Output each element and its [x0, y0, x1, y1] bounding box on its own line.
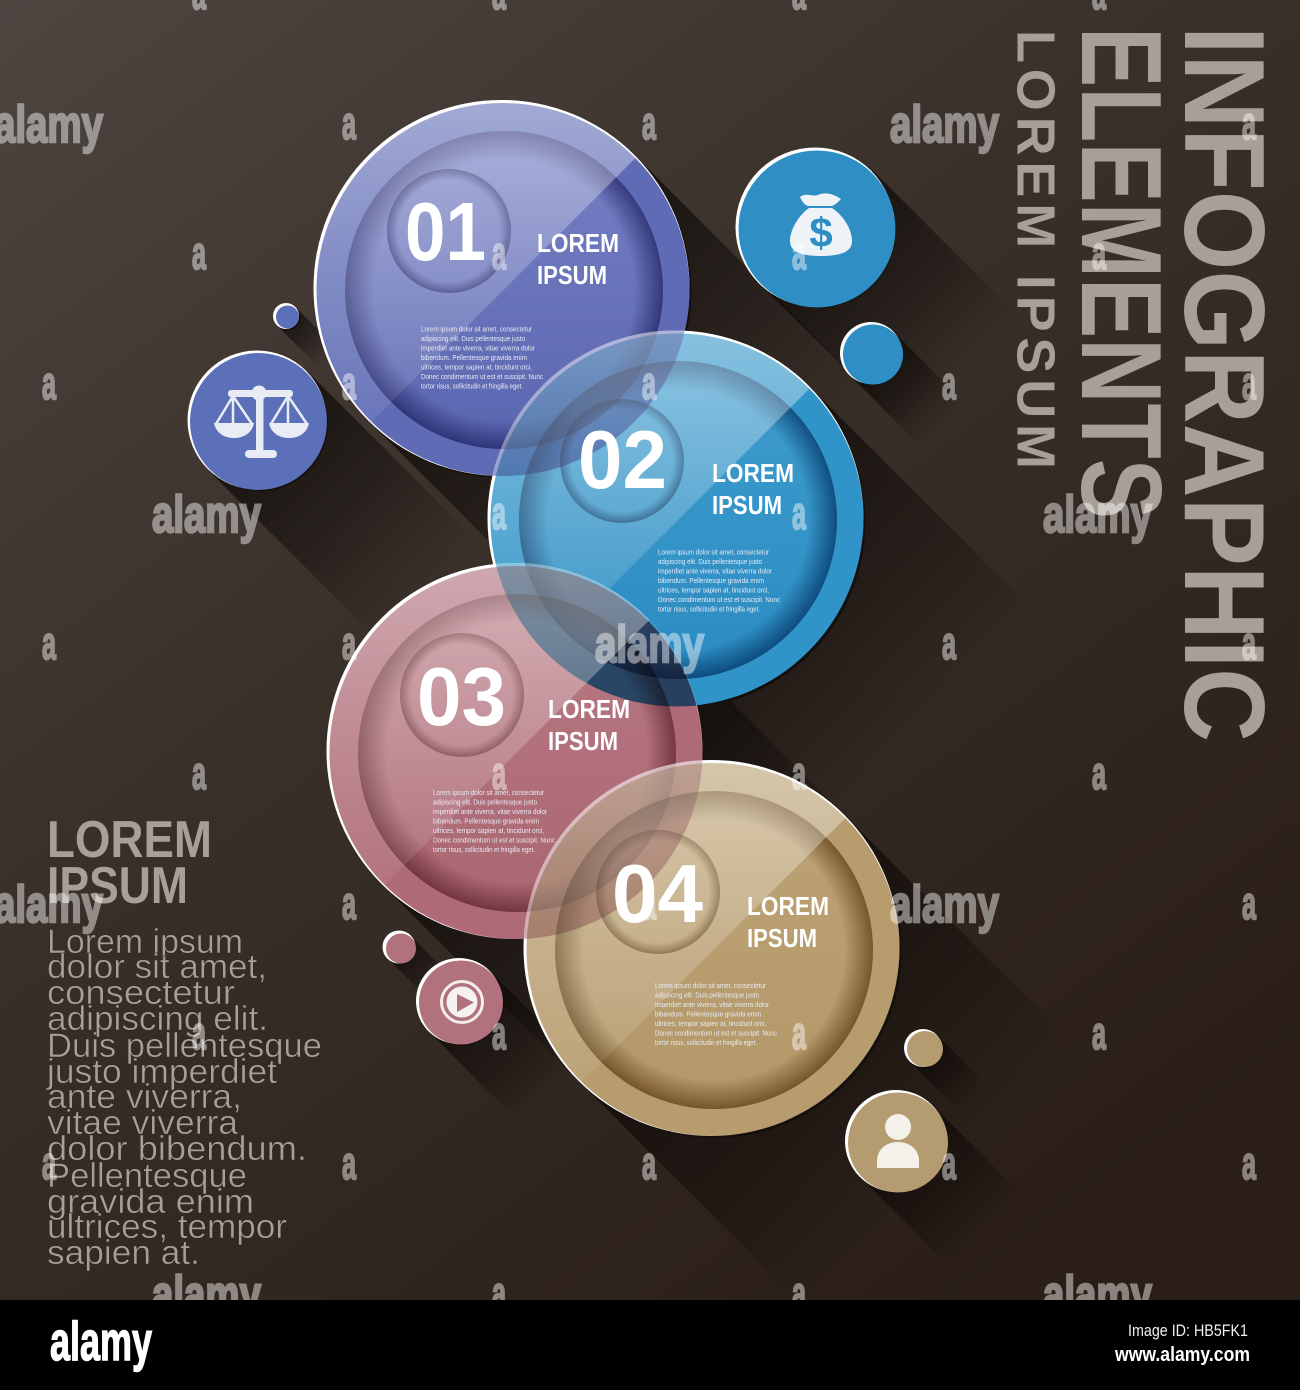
text: circle 04: Donec condimentum ut est et suscipit. Nunc — [655, 1028, 777, 1038]
watermark overlay: a — [192, 1007, 206, 1059]
watermark overlay: a — [342, 97, 356, 149]
watermark overlay: a — [492, 487, 506, 539]
text: circle 02: Lorem ipsum dolor sit amet, consectetur — [658, 548, 769, 556]
watermark overlay: a — [642, 97, 656, 149]
watermark overlay: a — [942, 617, 956, 669]
text: circle 04: bibendum. Pellentesque gravida enim — [655, 1010, 761, 1018]
watermark overlay: a — [1242, 1137, 1256, 1189]
text: circle 01: tortor risus, sollicitudin et fringilla eget. — [421, 382, 523, 390]
text: circle 02: adipiscing elit. Duis pellentesque justo — [658, 557, 762, 566]
text: circle 01: bibendum. Pellentesque gravida enim — [421, 353, 527, 362]
text: circle 01: ultrices, tempor sapien at, tincidunt orci, — [421, 362, 532, 372]
watermark overlay: a — [642, 1137, 656, 1189]
text: circle 01: Donec condimentum ut est et suscipit. Nunc — [421, 372, 543, 381]
watermark overlay: a — [342, 1137, 356, 1189]
text: circle 02: Donec condimentum ut est et suscipit. Nunc — [658, 595, 780, 604]
watermark overlay: a — [1242, 97, 1256, 149]
icon: money bag badge — [736, 148, 896, 308]
left body text: Duis pellentesque — [47, 1027, 322, 1065]
text: circle 02 — [578, 413, 794, 614]
watermark overlay: alamy — [890, 96, 999, 154]
watermark overlay: a — [1092, 227, 1106, 279]
text: circle 01: imperdiet ante viverra, vitae viverra dolor — [421, 344, 535, 352]
left body text: Pellentesque — [47, 1157, 247, 1195]
watermark overlay: alamy — [890, 876, 999, 934]
text: circle 03: adipiscing elit. Duis pellentesque justo — [433, 798, 537, 806]
text: circle 02: imperdiet ante viverra, vitae viverra dolor — [658, 566, 772, 576]
text: circle 01: 01 — [405, 185, 486, 278]
watermark overlay: a — [492, 227, 506, 279]
panel: circle 03 — [326, 563, 702, 939]
left body text: gravida enim — [47, 1183, 254, 1221]
watermark overlay: a — [792, 747, 806, 799]
text: circle 03: imperdiet ante viverra, vitae viverra dolor — [433, 807, 547, 816]
small pink dot — [382, 930, 416, 964]
watermark overlay: a — [642, 357, 656, 409]
watermark overlay: a — [42, 357, 56, 409]
text: circle 03: ultrices, tempor sapien at, tincidunt orci, — [433, 826, 544, 835]
watermark overlay: alamy — [1043, 1266, 1152, 1324]
left body text: dolor sit amet, — [47, 948, 267, 986]
text: circle 01: LOREM — [537, 228, 619, 258]
text: circle 04: IPSUM — [747, 923, 817, 953]
watermark overlay: a — [1242, 877, 1256, 929]
text: circle 04: LOREM — [747, 891, 829, 921]
left body text: dolor bibendum. — [47, 1130, 307, 1168]
watermark overlay: a — [1242, 617, 1256, 669]
watermark overlay: a — [1092, 1007, 1106, 1059]
panel: circle 01 — [314, 100, 692, 478]
left body text — [46, 923, 322, 1272]
text: circle 04: imperdiet ante viverra, vitae viverra dolor — [655, 1000, 769, 1009]
text: circle 02: IPSUM — [712, 490, 782, 520]
text: circle 03: tortor risus, sollicitudin et fringilla eget. — [433, 845, 535, 854]
title: infographic elements (vertical) — [1006, 26, 1287, 742]
text: circle 01: Lorem ipsum dolor sit amet, consectetur — [421, 324, 532, 334]
watermark overlay: a — [792, 487, 806, 539]
watermark overlay: a — [792, 1007, 806, 1059]
footer bar: alamy — [50, 1310, 152, 1372]
text: circle 02: bibendum. Pellentesque gravida enim — [658, 576, 764, 585]
left body text: vitae viverra — [47, 1104, 238, 1142]
text: circle 03: bibendum. Pellentesque gravida enim — [433, 816, 539, 826]
small blue dot — [840, 322, 903, 385]
watermark overlay: a — [192, 227, 206, 279]
text: circle 03: Donec condimentum ut est et suscipit. Nunc — [433, 836, 555, 844]
watermark overlay: a — [42, 1137, 56, 1189]
watermark overlay: a — [342, 617, 356, 669]
title: infographic elements (vertical): INFOGRAPHIC — [1160, 26, 1287, 742]
watermark overlay: a — [942, 357, 956, 409]
small tan dot — [904, 1029, 943, 1068]
text: circle 02: ultrices, tempor sapien at, tincidunt orci, — [658, 586, 769, 594]
text: circle 01: IPSUM — [537, 260, 607, 290]
text: circle 02: LOREM — [712, 458, 794, 488]
text: circle 03: Lorem ipsum dolor sit amet, consectetur — [433, 788, 544, 797]
icon: person badge — [845, 1090, 948, 1193]
footer bar: Image ID: HB5FK1 — [1128, 1321, 1248, 1340]
text: circle 04: ultrices, tempor sapien at, tincidunt orci, — [655, 1019, 766, 1028]
text: circle 01: adipiscing elit. Duis pellentesque justo — [421, 334, 525, 343]
watermark overlay: a — [1242, 357, 1256, 409]
left body text: ultrices, tempor — [47, 1208, 287, 1246]
footer bar — [0, 1300, 1300, 1390]
watermark overlay: a — [192, 747, 206, 799]
left body text: sapien at. — [47, 1234, 200, 1272]
text: circle 03 — [417, 650, 630, 854]
watermark overlay: a — [492, 747, 506, 799]
small indigo dot — [273, 303, 300, 330]
icon: scales badge — [188, 350, 328, 491]
text: circle 02: 02 — [578, 413, 667, 506]
left body text: justo imperdiet — [46, 1053, 278, 1091]
watermark overlay: a — [642, 877, 656, 929]
icon: money bag badge: $ — [809, 209, 833, 256]
long shadows — [208, 155, 1071, 1307]
text: circle 04: 04 — [612, 847, 703, 940]
text: circle 01 — [405, 185, 619, 390]
left heading: LOREM — [47, 811, 212, 869]
panel: circle 04 — [524, 760, 902, 1138]
text: circle 03: LOREM — [548, 694, 630, 724]
left body text: ante viverra, — [47, 1078, 242, 1116]
title: infographic elements (vertical): ELEMENTS — [1057, 27, 1184, 519]
watermark overlay: a — [42, 617, 56, 669]
watermark overlay: a — [942, 1137, 956, 1189]
text: circle 04: tortor risus, sollicitudin et fringilla eget. — [655, 1038, 757, 1047]
watermark overlay: a — [342, 357, 356, 409]
footer bar: www.alamy.com — [1114, 1344, 1250, 1366]
watermark overlay: alamy — [1043, 486, 1152, 544]
watermark overlay: alamy — [595, 616, 704, 674]
watermark overlay: a — [342, 877, 356, 929]
watermark overlay: alamy — [152, 486, 261, 544]
title: infographic elements (vertical): LOREM IPSUM — [1006, 30, 1066, 469]
watermark overlay: a — [492, 1267, 506, 1319]
left body text: adipiscing elit. — [47, 1000, 268, 1038]
text: circle 03: 03 — [417, 650, 506, 743]
left body text: consectetur — [47, 974, 235, 1012]
text: circle 04: Lorem ipsum dolor sit amet, consectetur — [655, 981, 766, 990]
watermark overlay: a — [1092, 747, 1106, 799]
text: circle 04 — [612, 847, 829, 1047]
watermark overlay: a — [492, 1007, 506, 1059]
text: circle 03: IPSUM — [548, 726, 618, 756]
icon: play badge — [416, 958, 504, 1046]
watermark overlay: alamy — [152, 1266, 261, 1324]
panel: circle 02 — [488, 330, 866, 706]
left heading: IPSUM — [47, 857, 188, 915]
left heading — [47, 811, 212, 915]
left body text: Lorem ipsum — [47, 923, 243, 961]
watermark overlay: a — [792, 227, 806, 279]
text: circle 04: adipiscing elit. Duis pellentesque justo — [655, 990, 759, 1000]
text: circle 02: tortor risus, sollicitudin et fringilla eget. — [658, 604, 760, 614]
watermark overlay: a — [792, 1267, 806, 1319]
